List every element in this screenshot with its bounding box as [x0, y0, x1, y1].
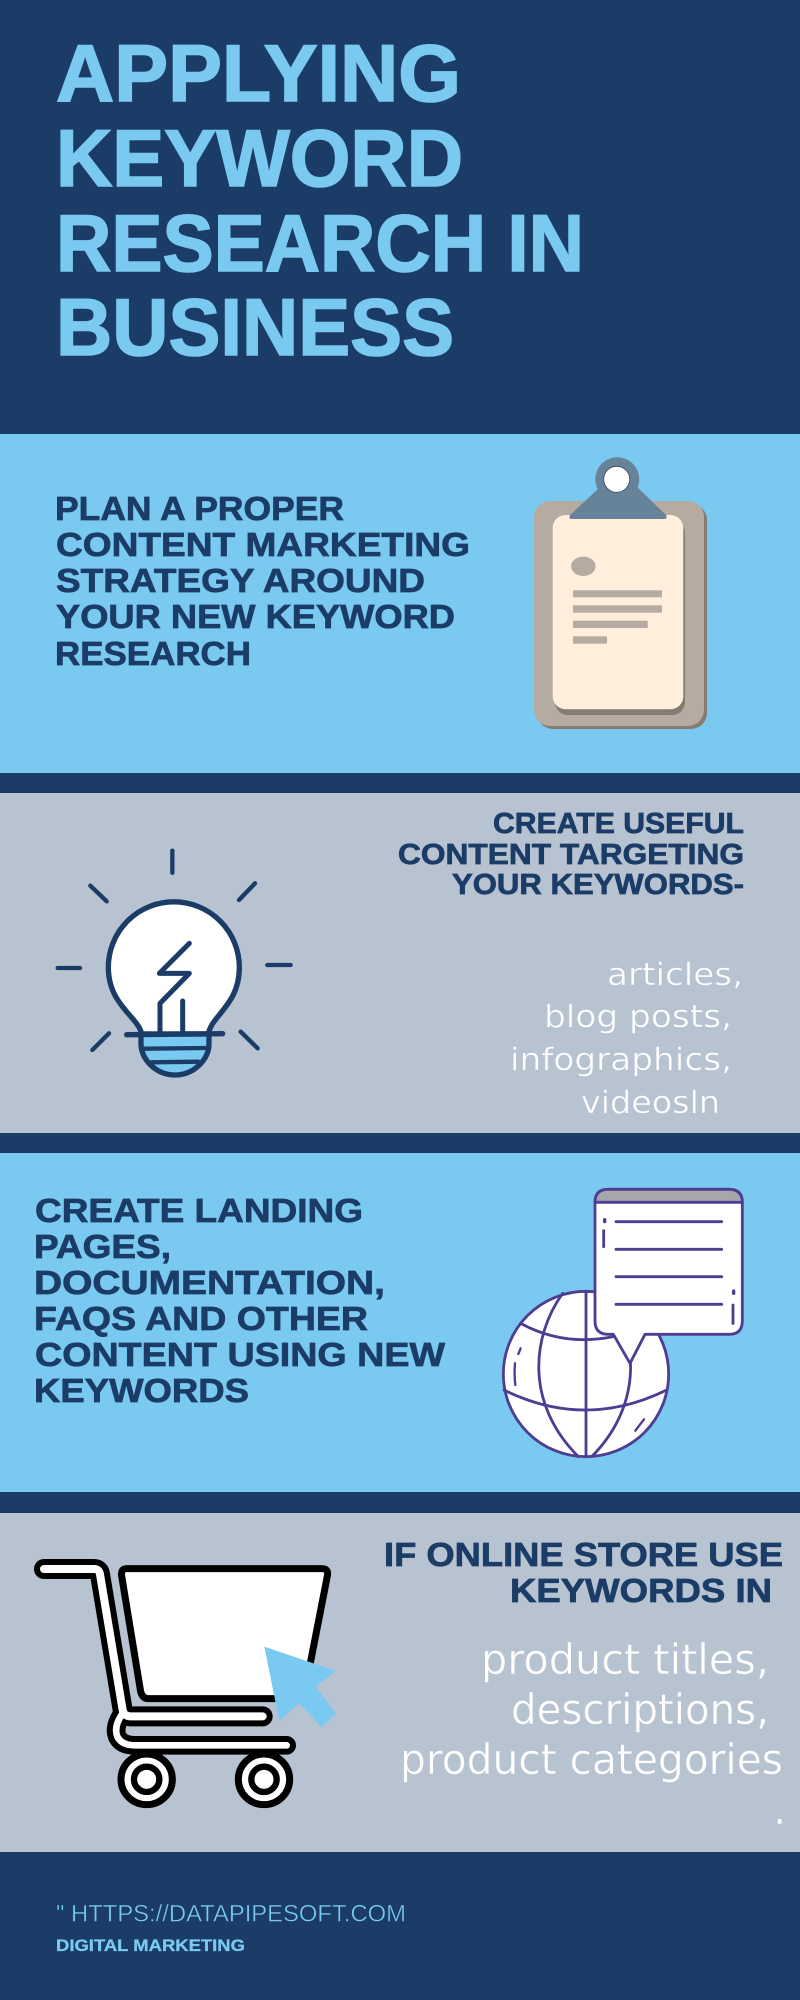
heading: create landing pages: CREATE LANDING [35, 1192, 363, 1229]
heading: create landing pages: CONTENT USING NEW [35, 1336, 446, 1373]
heading: create useful content [398, 808, 744, 901]
heading: if online store: IF ONLINE STORE USE [384, 1536, 783, 1573]
heading: if online store: KEYWORDS IN [510, 1572, 772, 1609]
panel: landing pages [0, 1153, 800, 1492]
icon: globe with speech bubble [503, 1189, 742, 1457]
heading: create landing pages: KEYWORDS [34, 1372, 249, 1409]
heading: plan a proper content marketing strategy: CONTENT MARKETING [56, 526, 470, 563]
icon: clipboard [534, 457, 707, 729]
heading: create landing pages: FAQS AND OTHER [34, 1300, 368, 1337]
heading: plan a proper content marketing strategy: STRATEGY AROUND [56, 562, 425, 599]
icon: shopping cart with cursor [44, 1569, 336, 1805]
title: RESEARCH IN [56, 199, 584, 289]
title [56, 29, 584, 373]
heading: create landing pages: PAGES, [34, 1228, 171, 1265]
text: product fields: descriptions, [511, 1685, 769, 1734]
heading: create useful content: CONTENT TARGETING [398, 839, 744, 871]
text: product fields: product titles, [481, 1635, 769, 1684]
heading: if online store [384, 1536, 783, 1609]
text: product fields [400, 1635, 786, 1834]
heading: plan a proper content marketing strategy [55, 490, 470, 672]
icon: light bulb [58, 851, 291, 1075]
title: APPLYING [56, 29, 461, 119]
text: content types: videosln [581, 1085, 720, 1121]
text: content types [510, 957, 743, 1121]
panel: online store [0, 1513, 800, 1852]
panel: content marketing strategy [0, 434, 800, 773]
heading: plan a proper content marketing strategy: PLAN A PROPER [55, 490, 344, 527]
title: KEYWORD [56, 114, 463, 204]
footer [56, 1900, 406, 1955]
title: BUSINESS [56, 283, 454, 373]
text: product fields: product categories [400, 1735, 783, 1784]
heading: create useful content: CREATE USEFUL [493, 808, 744, 840]
heading: plan a proper content marketing strategy: RESEARCH [55, 635, 251, 672]
text: content types: infographics, [510, 1042, 732, 1078]
footer label: DIGITAL MARKETING [56, 1936, 245, 1955]
heading: create useful content: YOUR KEYWORDS- [452, 869, 744, 901]
heading: create landing pages: DOCUMENTATION, [34, 1264, 385, 1301]
heading: create landing pages [34, 1192, 446, 1409]
heading: plan a proper content marketing strategy: YOUR NEW KEYWORD [56, 598, 455, 635]
text: content types: blog posts, [544, 999, 732, 1035]
text: product fields: . [773, 1785, 786, 1834]
footer url: " HTTPS://DATAPIPESOFT.COM [56, 1900, 406, 1928]
text: content types: articles, [607, 957, 743, 993]
panel: useful content [0, 793, 800, 1133]
